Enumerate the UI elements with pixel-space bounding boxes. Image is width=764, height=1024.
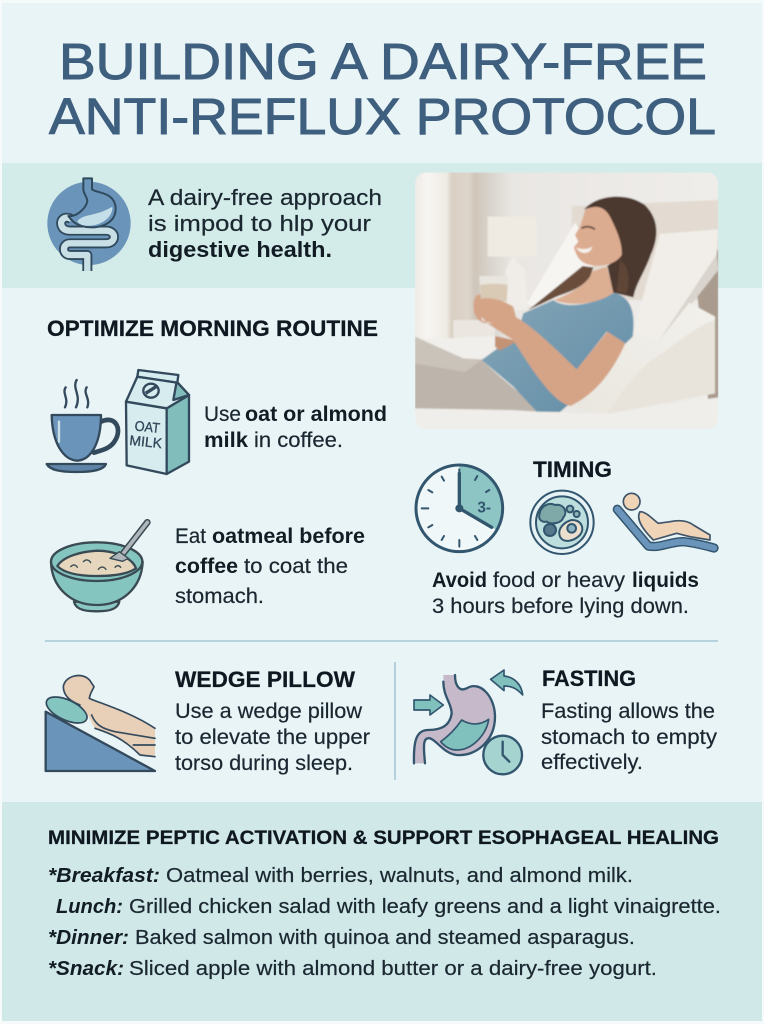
meal list: Sliced apple with almond butter or a dairy-free yogurt. bbox=[129, 957, 657, 980]
text: oat or almond milk: Use bbox=[204, 403, 241, 426]
blue t-shirt bbox=[482, 293, 634, 412]
meal list: *Breakfast: bbox=[48, 864, 160, 887]
icon: coffee cup bbox=[47, 380, 118, 472]
bed and mattress bbox=[415, 336, 718, 429]
text: wedge pillow: WEDGE PILLOW bbox=[175, 667, 356, 692]
text: avoid food: Avoid bbox=[432, 568, 487, 592]
text: avoid food: 3 hours before lying down. bbox=[432, 594, 689, 618]
icon: oat milk carton bbox=[126, 370, 189, 474]
face bbox=[574, 207, 622, 266]
icon: person reclining bbox=[617, 493, 714, 548]
legs in loungewear bbox=[415, 337, 483, 374]
meal list bbox=[48, 864, 721, 980]
text: wedge pillow: Use a wedge pillow bbox=[175, 700, 363, 723]
meal list: Grilled chicken salad with leafy greens and a light vinaigrette. bbox=[129, 895, 721, 918]
intro text: digestive health. bbox=[148, 237, 332, 262]
text: wedge pillow: to elevate the upper bbox=[175, 726, 370, 749]
title bbox=[49, 33, 716, 145]
glass of milk bbox=[475, 276, 517, 323]
heading: timing: TIMING bbox=[533, 457, 612, 482]
woman bbox=[415, 197, 656, 412]
text: oat or almond milk: oat or almond bbox=[245, 403, 387, 426]
text: avoid food: liquids bbox=[632, 568, 699, 592]
text: oat or almond milk bbox=[204, 403, 387, 452]
icon: stomach and intestines bbox=[47, 178, 131, 271]
text: oatmeal before coffee: coffee bbox=[175, 555, 238, 578]
meal list: Oatmeal with berries, walnuts, and almond milk. bbox=[166, 864, 633, 887]
photo background: wall and curtains bbox=[415, 172, 718, 429]
icon: oat milk carton: MILK bbox=[129, 432, 164, 451]
photo: woman reclining on a wedge pillow with a drink bbox=[415, 172, 718, 429]
intro band bbox=[2, 163, 762, 288]
text: oatmeal before coffee: to coat the bbox=[244, 555, 348, 578]
heading: minimize peptic activation: MINIMIZE PEPTIC ACTIVATION & SUPPORT ESOPHAGEAL HEALING bbox=[48, 827, 719, 849]
neck and chest bbox=[554, 267, 614, 304]
icon: stomach emptying with clock and arrows bbox=[414, 670, 523, 774]
text: oatmeal before coffee: Eat bbox=[175, 525, 206, 548]
icon: oatmeal bowl with spoon bbox=[51, 522, 147, 611]
text: oatmeal before coffee: oatmeal before bbox=[212, 525, 365, 548]
intro text bbox=[148, 185, 382, 262]
text: fasting: Fasting allows the bbox=[541, 700, 715, 723]
text: fasting: stomach to empty bbox=[541, 726, 718, 749]
text: wedge pillow bbox=[175, 667, 370, 775]
icon: clock showing three hours: 3- bbox=[477, 500, 491, 517]
wedge pillow bbox=[608, 302, 716, 413]
text: fasting bbox=[541, 666, 718, 774]
meal list: *Snack: bbox=[48, 957, 124, 980]
bottom band bbox=[2, 802, 762, 1021]
text: oat or almond milk: milk bbox=[204, 429, 248, 452]
arms and hands bbox=[495, 336, 515, 351]
icon: plate of food bbox=[530, 491, 594, 554]
bedside lamp and nightstand bbox=[453, 216, 510, 338]
text: fasting: effectively. bbox=[541, 751, 643, 774]
meal list: Baked salmon with quinoa and steamed asparagus. bbox=[135, 926, 635, 949]
text: fasting: FASTING bbox=[542, 666, 636, 691]
text: wedge pillow: torso during sleep. bbox=[175, 752, 353, 775]
meal list: *Dinner: bbox=[48, 926, 129, 949]
icon: wedge pillow with person bbox=[43, 676, 155, 771]
icon: clock showing three hours bbox=[416, 465, 503, 552]
white pillows bbox=[527, 223, 718, 342]
title: ANTI-REFLUX PROTOCOL bbox=[49, 88, 716, 145]
title: BUILDING A DAIRY-FREE bbox=[59, 33, 707, 90]
text: oatmeal before coffee: stomach. bbox=[175, 585, 264, 608]
icon: oat milk carton: OAT bbox=[134, 417, 161, 436]
text: avoid food bbox=[432, 568, 699, 618]
intro text: A dairy-free approach bbox=[148, 185, 382, 210]
text: oat or almond milk: in coffee. bbox=[254, 429, 343, 452]
text: avoid food: food or heavy bbox=[493, 568, 625, 592]
text: oatmeal before coffee bbox=[175, 525, 365, 608]
intro text: is impod to hlp your bbox=[148, 211, 371, 236]
heading: optimize morning routine: OPTIMIZE MORNING ROUTINE bbox=[47, 316, 378, 341]
long brown hair bbox=[584, 197, 656, 297]
meal list: Lunch: bbox=[56, 895, 123, 918]
